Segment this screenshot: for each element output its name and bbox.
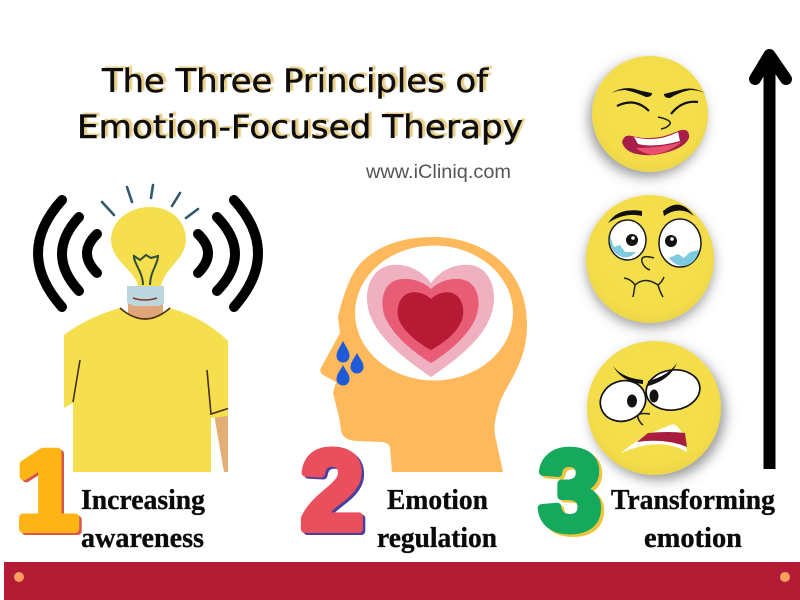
arm	[214, 412, 228, 472]
label: transforming emotion: emotion	[644, 522, 742, 554]
tear drops	[336, 341, 364, 386]
bulb	[111, 207, 186, 286]
title	[77, 62, 523, 146]
filament	[134, 255, 158, 285]
label: increasing awareness: Increasing	[81, 484, 205, 516]
number 1: 1	[16, 428, 78, 553]
label: increasing awareness: awareness	[81, 522, 204, 554]
shirt lines	[73, 308, 228, 414]
head cavity	[355, 246, 513, 380]
illustration: person with light bulb head	[38, 185, 258, 472]
emoji: bottom angry face	[587, 341, 721, 475]
emoji: top laughing/squinting face	[592, 56, 708, 172]
website credit: www.iCliniq.com	[365, 162, 511, 183]
heart outer	[367, 265, 494, 377]
illustration: head with heart	[320, 237, 527, 472]
footer dot right	[780, 572, 790, 582]
heart inner	[398, 292, 463, 350]
label: transforming emotion	[611, 484, 775, 554]
collar smile	[133, 298, 157, 300]
bulb rays	[102, 185, 198, 218]
sound waves left	[38, 200, 97, 307]
head silhouette	[320, 237, 527, 472]
neck	[128, 300, 163, 320]
emoji: middle crying face	[586, 195, 714, 323]
bulb collar	[127, 286, 164, 306]
label: emotion regulation: regulation	[377, 522, 497, 554]
title: Emotion-Focused Therapy	[77, 108, 523, 146]
label: emotion regulation	[377, 484, 497, 554]
footer band	[4, 562, 800, 600]
title: The Three Principles of	[101, 62, 489, 100]
label: emotion regulation: Emotion	[387, 484, 488, 516]
number 3: 3	[539, 428, 601, 553]
footer dot left	[14, 572, 24, 582]
arrow: upward	[755, 55, 786, 469]
label: increasing awareness	[81, 484, 205, 554]
number 2: 2	[301, 428, 363, 553]
heart middle	[382, 279, 479, 363]
sound waves right	[198, 200, 258, 307]
shirt	[64, 308, 228, 472]
label: transforming emotion: Transforming	[611, 484, 775, 516]
